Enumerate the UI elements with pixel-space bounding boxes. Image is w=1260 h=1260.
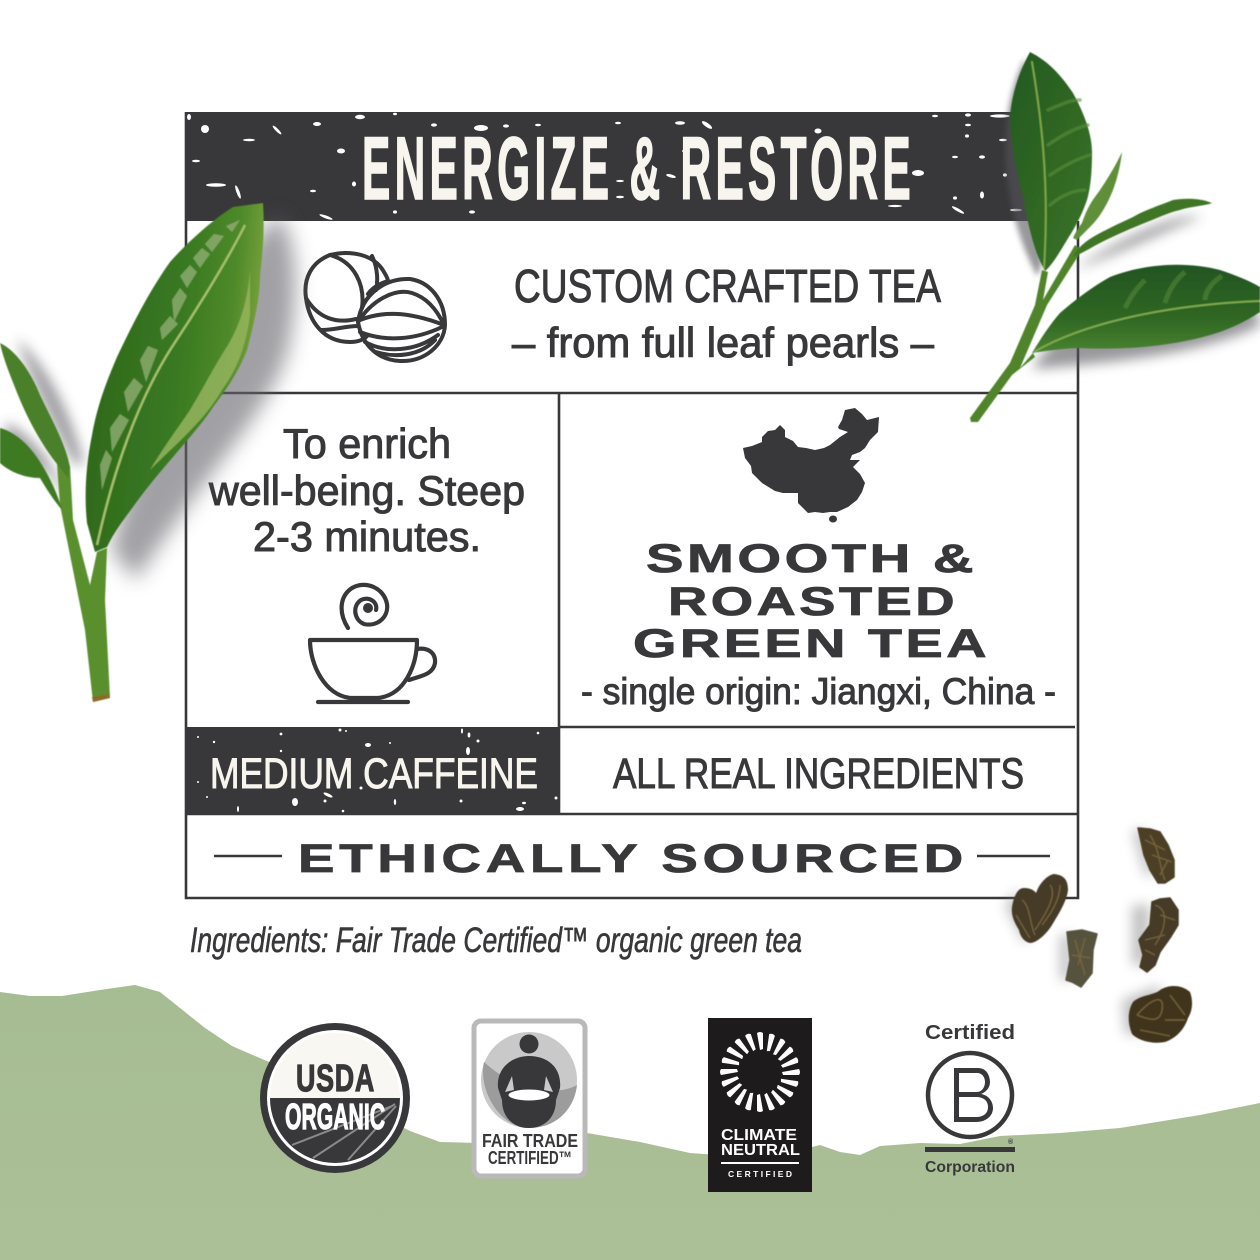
panel: product info box [185, 112, 1078, 898]
text: ingredients: Ingredients: Fair Trade Certified™ organic green tea [190, 921, 802, 960]
text: smooth and roasted green tea: GREEN TEA [633, 622, 990, 666]
pearl 2 [1066, 930, 1097, 987]
right tea leaf sprig [970, 52, 1260, 422]
stem [970, 245, 1082, 422]
text: ethically sourced: ETHICALLY SOURCED [298, 837, 968, 881]
ORGANIC text: ORGANIC [285, 1096, 385, 1137]
text: custom crafted tea: CUSTOM CRAFTED TEA [514, 260, 941, 312]
stem [57, 464, 110, 702]
pearl 1 [1012, 874, 1068, 943]
leaf light patches and midrib [97, 220, 250, 545]
letter B [954, 1068, 993, 1122]
pearl 3 [1138, 828, 1174, 883]
badge: Fair Trade Certified [474, 1021, 585, 1176]
badge: Certified B Corporation: ® [1008, 1138, 1014, 1146]
text: steeping instruction: 2-3 minutes. [253, 513, 481, 560]
text: medium caffeine: MEDIUM CAFFEINE [210, 750, 538, 798]
lower leaf veins [1034, 272, 1260, 352]
badge: Certified B Corporation: Corporation [925, 1159, 1015, 1176]
leaf artwork [0, 203, 264, 702]
stem cut end [92, 694, 110, 702]
Climate Neutral text: NEUTRAL [721, 1142, 800, 1159]
green torn paper background [0, 985, 1260, 1260]
text: steeping instruction [208, 420, 525, 560]
badge: Certified B Corporation [925, 1021, 1015, 1176]
badge: Certified B Corporation: Certified [925, 1021, 1015, 1044]
heading banner [185, 112, 1045, 221]
Climate Neutral text [721, 1127, 800, 1179]
USDA text: USDA [296, 1058, 375, 1100]
sun icon [720, 1032, 800, 1112]
text: custom crafted tea [512, 260, 941, 366]
leaf shadows [6, 215, 295, 580]
badge: USDA organic [260, 1023, 410, 1173]
text: smooth and roasted green tea [581, 537, 1056, 712]
leaf artwork [970, 52, 1260, 422]
pearl 5 [1129, 986, 1192, 1043]
caffeine badge [187, 727, 559, 814]
Climate Neutral text: CERTIFIED [728, 1169, 792, 1179]
scattered tea pearls [1005, 828, 1192, 1043]
leaf shadows [1005, 58, 1260, 369]
small lower leaf [0, 428, 62, 510]
bud leaf [1073, 152, 1122, 240]
main leaf [86, 203, 264, 552]
text: single origin: - single origin: Jiangxi, China - [581, 671, 1056, 712]
text: steeping instruction: To enrich [283, 420, 451, 467]
icon: steaming tea cup [310, 585, 435, 702]
top leaf [1010, 52, 1092, 271]
large lower leaf [1032, 265, 1260, 353]
Climate Neutral text: CLIMATE [721, 1127, 797, 1144]
left tea leaf sprig [0, 203, 295, 702]
badge: Fair Trade Certified: CERTIFIED™ [488, 1148, 572, 1168]
Fair Trade text: FAIR TRADE [482, 1131, 578, 1151]
pearl artwork [1012, 828, 1192, 1043]
text: all real ingredients: ALL REAL INGREDIENTS [613, 750, 1024, 798]
pearl 4 [1139, 898, 1178, 972]
top leaf veins [1032, 62, 1090, 268]
pearl highlights [1016, 835, 1185, 1036]
text: steeping instruction: well-being. Steep [208, 467, 525, 514]
badge: Climate Neutral Certified [708, 1018, 812, 1192]
icon: tea pearls [305, 253, 445, 361]
pearl shadows [1005, 830, 1160, 1035]
text: custom crafted tea: – from full leaf pearls – [512, 319, 935, 366]
thin leaf [1073, 199, 1212, 257]
text: smooth and roasted green tea: ROASTED [668, 580, 958, 624]
heading speckles [187, 113, 1022, 221]
caffeine speckles [197, 728, 558, 812]
icon: map of China [743, 408, 879, 522]
text: smooth and roasted green tea: SMOOTH & [646, 537, 977, 581]
panel outline and grid lines [186, 112, 1078, 898]
small upper leaf [0, 343, 70, 478]
